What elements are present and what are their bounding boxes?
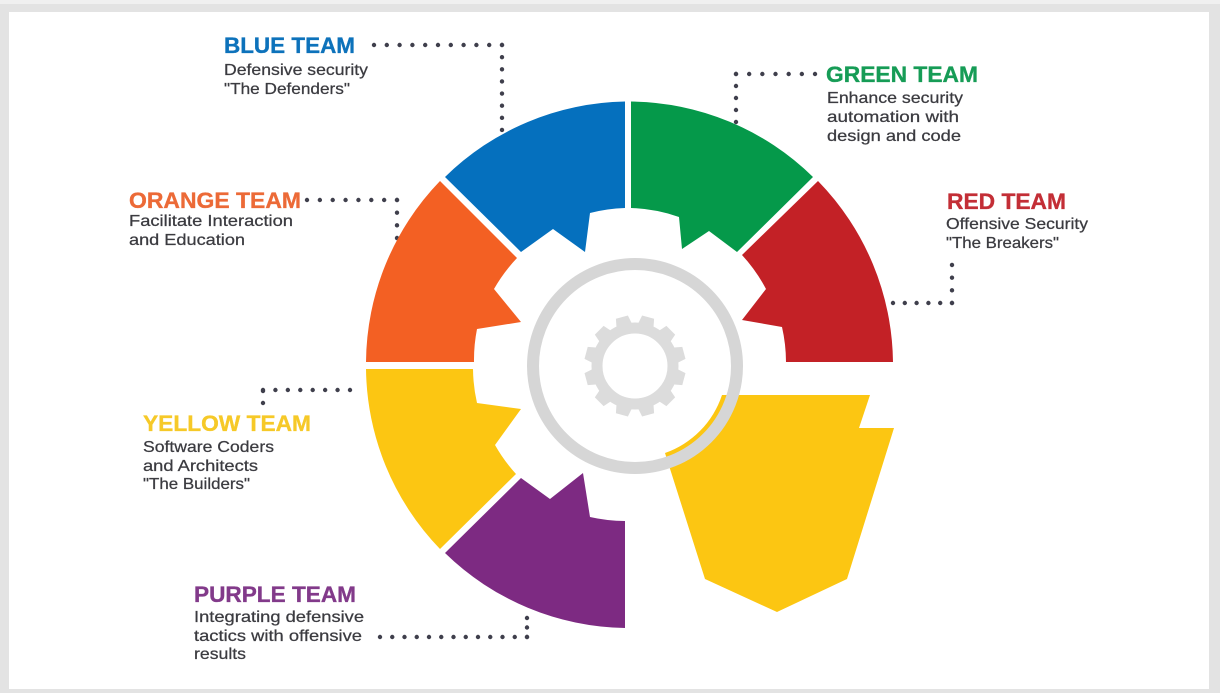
label: green team: Enhance security [827, 90, 963, 107]
label: orange team: ORANGE TEAM [129, 188, 301, 213]
segment: green [631, 102, 813, 252]
label: yellow team [143, 411, 311, 493]
label: yellow team: YELLOW TEAM [143, 411, 311, 436]
segment: orange [366, 181, 521, 362]
label: purple team: PURPLE TEAM [194, 582, 356, 607]
segment: displaced yellow keystone [665, 395, 894, 612]
label: orange team: and Education [129, 232, 245, 249]
label: yellow team: and Architects [143, 458, 258, 475]
segment: purple [445, 473, 625, 628]
connector: blue team [374, 45, 502, 130]
label: yellow team: Software Coders [143, 439, 274, 456]
connector: red team [893, 264, 952, 303]
label: purple team: tactics with offensive [194, 628, 362, 645]
connector: orange team [307, 200, 398, 238]
label: purple team [194, 582, 364, 663]
connector: green team [736, 74, 816, 122]
label: red team: Offensive Security [946, 216, 1088, 233]
label: green team [826, 62, 978, 145]
segment: red [742, 181, 893, 362]
label: green team: automation with [827, 109, 959, 126]
label: green team: GREEN TEAM [826, 62, 978, 87]
label: blue team: "The Defenders" [224, 81, 350, 98]
label: red team [946, 189, 1088, 252]
label: purple team: Integrating defensive [194, 609, 364, 626]
label: blue team: BLUE TEAM [224, 33, 355, 58]
label: blue team: Defensive security [224, 62, 368, 79]
label: red team: "The Breakers" [946, 235, 1059, 252]
label: red team: RED TEAM [947, 189, 1066, 214]
connector: purple team [380, 618, 528, 637]
label: orange team [129, 188, 301, 249]
label: blue team [224, 33, 368, 98]
label: yellow team: "The Builders" [143, 476, 250, 493]
segment: yellow left [366, 369, 521, 549]
label: orange team: Facilitate Interaction [129, 213, 293, 230]
connector: yellow team [262, 390, 350, 404]
segment: blue [445, 102, 625, 252]
central ring [533, 264, 737, 468]
label: green team: design and code [827, 128, 961, 145]
label: purple team: results [194, 646, 246, 663]
icon: gear [584, 315, 686, 417]
